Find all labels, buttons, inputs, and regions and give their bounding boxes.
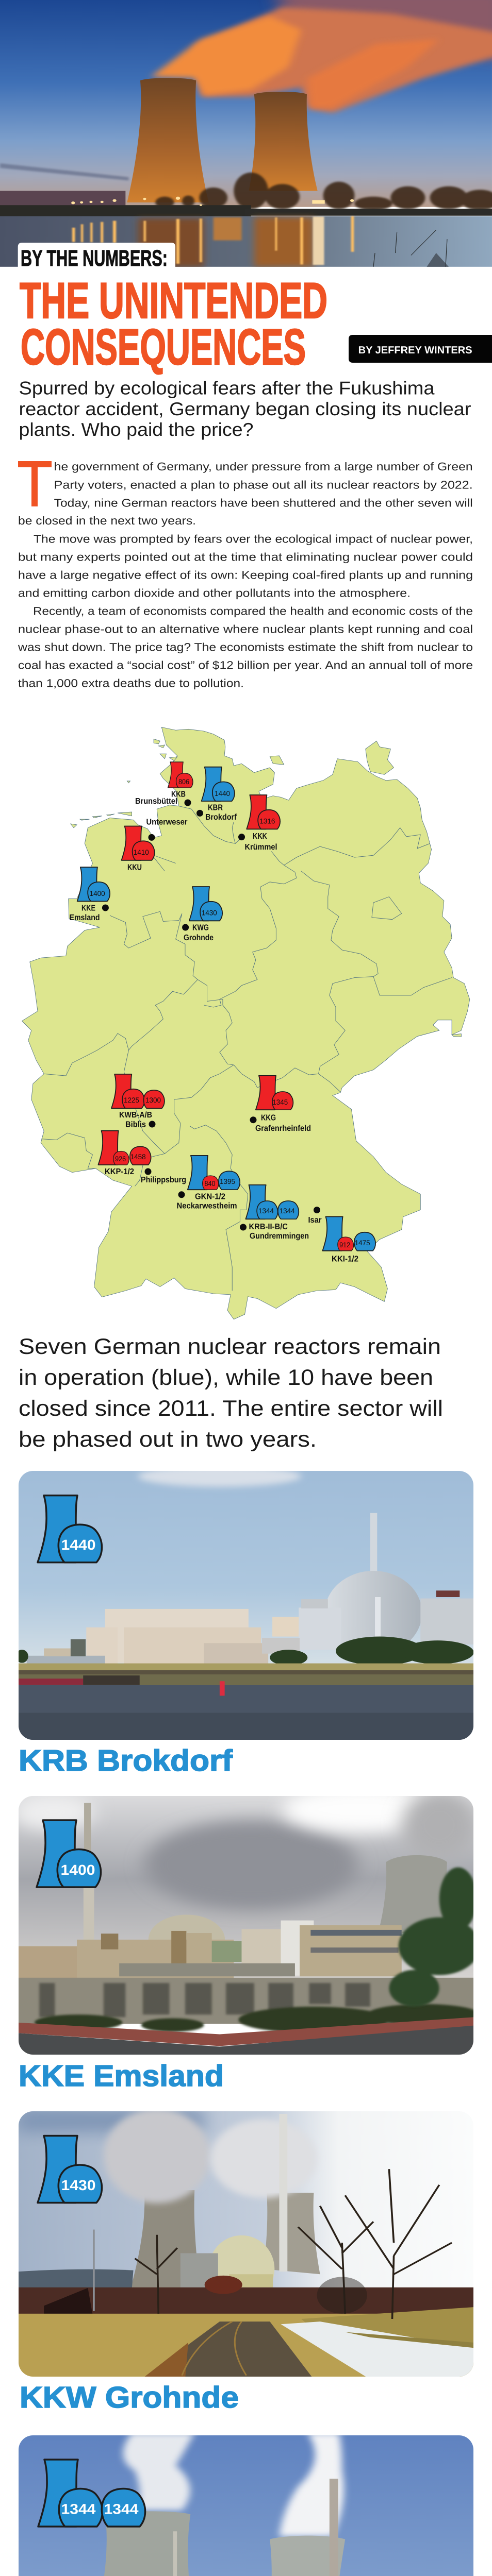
map icon: KWB Biblis closed: 1300 [145, 1096, 161, 1104]
map labels: Isar [308, 1216, 322, 1225]
map labels: Biblis [125, 1120, 146, 1129]
map icon: KKI Isar [322, 1217, 375, 1251]
map labels: KBR [208, 804, 223, 812]
map icon: KKG Grafenrheinfeld closed: 1345 [272, 1098, 288, 1106]
map icon: KKU Unterweser closed [122, 826, 155, 860]
map labels: KWB-A/B [119, 1111, 152, 1120]
map icon: KKB Brunsbuettel closed: 806 [178, 777, 189, 786]
intro subheading: reactor accident, Germany began closing its nuclear [19, 398, 471, 419]
panel: hero photo of cooling towers at dusk [0, 0, 492, 267]
drop cap T [18, 461, 52, 506]
map labels: GKN-1/2 [195, 1193, 225, 1201]
map labels: KKB [171, 790, 186, 799]
map labels: KKG [261, 1114, 276, 1122]
map icon: KKP Philippsburg closed: 926 [115, 1155, 126, 1163]
body text: and emitting carbon dioxide and other pollutants into the atmosphere. [18, 587, 411, 600]
intro subheading: Spurred by ecological fears after the Fukushima [19, 378, 435, 399]
map labels: KRB-II-B/C [249, 1223, 288, 1231]
map labels: Neckarwestheim [176, 1202, 237, 1211]
intro subheading [19, 378, 471, 440]
map labels: Brunsbüttel [135, 797, 177, 806]
map icon: KKG Grafenrheinfeld closed [256, 1076, 293, 1110]
body text: be closed in the next two years. [18, 514, 196, 527]
map icon: KKE Emsland active: 1400 [90, 889, 105, 897]
label: KKE Emsland: KKE Emsland [19, 2059, 224, 2093]
body text: nuclear phase-out to an alternative where nuclear plants kept running and coal [18, 623, 473, 636]
icon: reactor pair 1344: 1344 [104, 2501, 139, 2517]
body text: Today, nine German reactors have been shuttered and the other seven will [54, 497, 473, 509]
map labels: Unterweser [146, 818, 188, 826]
map labels: Krümmel [244, 843, 277, 852]
body text: coal has exacted a “social cost” of $12 billion per year. And an annual toll of more [18, 659, 473, 672]
byline [349, 335, 492, 363]
map icon: KKP Philippsburg closed: 1458 [130, 1153, 146, 1161]
body text: have a large negative effect of its own: Keeping coal-fired plants up and running [18, 569, 473, 582]
map icon: KKI Isar: 912 [339, 1241, 350, 1249]
title: the unintended consequences: THE UNINTENDED [20, 272, 327, 329]
map labels: Emsland [69, 913, 100, 922]
caption: seven reactors remain: Seven German nuclear reactors remain [19, 1334, 441, 1359]
map icon: KBR Brokdorf active: 1440 [215, 789, 230, 798]
badge: by the numbers [18, 243, 175, 271]
title: the unintended consequences: CONSEQUENCES [21, 318, 306, 375]
map icon: KWG Grohnde active [189, 887, 222, 921]
map labels: Grafenrheinfeld [255, 1124, 311, 1133]
caption: seven reactors remain [19, 1334, 443, 1452]
icon: reactor pair 1344 [38, 2460, 145, 2527]
body text: than 1,000 extra deaths due to pollution. [18, 677, 244, 689]
photo: KRB Brokdorf [15, 1466, 477, 1742]
body text: was shut down. The price tag? The economists estimate the shift from nuclear to [18, 641, 473, 654]
map location dots [102, 800, 320, 1230]
body text: he government of Germany, under pressure from a large number of Green [54, 460, 473, 473]
map icon: KWB Biblis closed [111, 1074, 165, 1108]
map icon: KKE Emsland active [77, 867, 110, 901]
map: Germany with nuclear reactors [22, 727, 470, 1319]
icon: reactor pair 1344: 1344 [61, 2501, 96, 2517]
map labels: KWG [192, 924, 209, 933]
photo: KKE Emsland [12, 1786, 480, 2057]
map icon: GKN Neckarwestheim: 840 [204, 1179, 216, 1188]
byline: BY JEFFREY WINTERS [358, 345, 472, 356]
caption: seven reactors remain: closed since 2011. The entire sector will [19, 1396, 443, 1421]
map icon: KKK Kruemmel closed [247, 795, 280, 829]
icon: reactor 1430: 1430 [61, 2177, 96, 2193]
map labels: KKK [253, 832, 267, 841]
caption: seven reactors remain: in operation (blue), while 10 have been [19, 1365, 433, 1390]
body text: but many experts pointed out at the time that eliminating nuclear power could [18, 550, 473, 563]
map labels: Gundremmingen [250, 1232, 309, 1241]
body text: The move was prompted by fears over the ecological impact of nuclear power, [34, 533, 473, 546]
map icon: KWB Biblis closed: 1225 [124, 1096, 139, 1104]
map labels [69, 790, 358, 1263]
title: the unintended consequences [20, 272, 327, 375]
map icon: KKB Brunsbuettel closed [168, 762, 193, 788]
map icon: GKN Neckarwestheim: 1395 [220, 1177, 235, 1185]
photo: KRB-II-B/C Gundremmingen [15, 2433, 477, 2576]
map icon: KKK Kruemmel closed: 1316 [259, 817, 275, 825]
map labels: KKE [81, 904, 95, 912]
map icon: KWG Grohnde active: 1430 [202, 909, 217, 917]
map labels: KKU [127, 863, 142, 872]
body text [18, 460, 473, 689]
icon: reactor 1400 [37, 1820, 101, 1887]
body text: Party voters, enacted a plan to phase out all its nuclear reactors by 2022. [54, 479, 473, 492]
intro subheading: plants. Who paid the price? [19, 419, 254, 440]
caption: seven reactors remain: be phased out in two years. [19, 1427, 317, 1452]
label: KRB Brokdorf: KRB Brokdorf [19, 1744, 233, 1777]
map labels: Brokdorf [205, 813, 237, 822]
label: KKW Grohnde: KKW Grohnde [20, 2381, 239, 2414]
photo: KKW Grohnde [15, 2109, 477, 2379]
icon: reactor 1400: 1400 [61, 1862, 95, 1878]
map icon: KRB Gundremmingen active: 1344 [258, 1207, 274, 1215]
map labels: Grohnde [184, 934, 214, 942]
icon: reactor 1440 [38, 1496, 102, 1563]
icon: reactor 1430 [38, 2136, 102, 2203]
map icon: KKU Unterweser closed: 1410 [134, 848, 149, 856]
icon: reactor 1440: 1440 [61, 1537, 96, 1553]
map icon: KRB Gundremmingen active: 1344 [280, 1207, 295, 1215]
map labels: Philippsburg [141, 1176, 186, 1184]
badge: by the numbers: BY THE NUMBERS: [21, 246, 168, 271]
map icon: KKI Isar: 1475 [355, 1239, 370, 1247]
map icon: KRB Gundremmingen active [245, 1185, 299, 1219]
map icon: KBR Brokdorf active [202, 767, 235, 801]
map labels: KKI-1/2 [332, 1255, 358, 1263]
map labels: KKP-1/2 [105, 1167, 134, 1176]
body text: Recently, a team of economists compared the health and economic costs of the [33, 605, 473, 618]
map icon: KKP Philippsburg closed [98, 1131, 151, 1165]
map icon: GKN Neckarwestheim [188, 1156, 240, 1190]
